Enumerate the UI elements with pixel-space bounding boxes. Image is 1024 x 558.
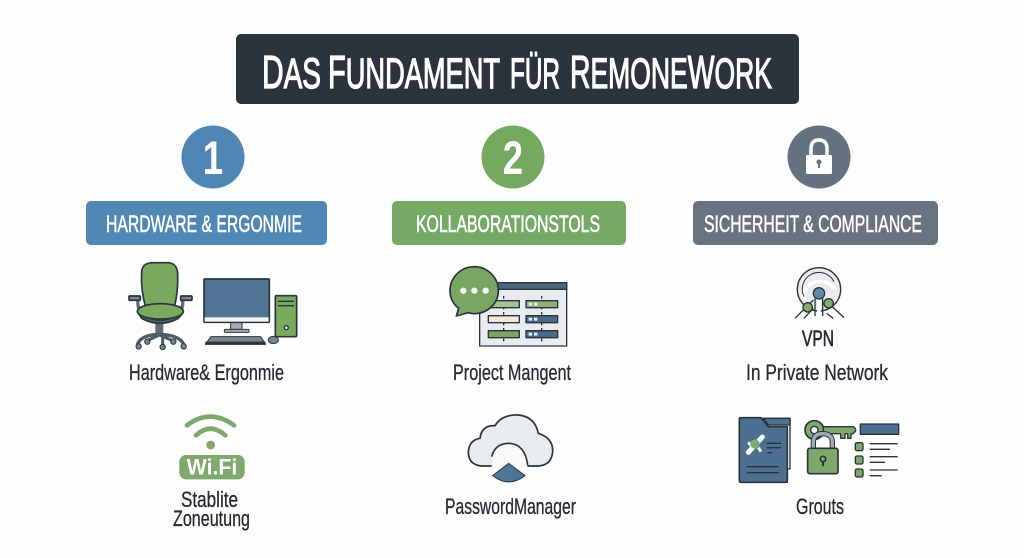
panel: collaboration tools	[392, 126, 626, 519]
label: stable connection: Zoneutung	[173, 506, 250, 531]
label: stable connection: Stablite	[181, 487, 238, 512]
heading banner: security	[693, 201, 938, 245]
icon: office chair and computer	[129, 263, 297, 350]
heading banner: hardware: HARDWARE & ERGONMIE	[106, 211, 302, 238]
label: project management: Project Mangent	[453, 360, 571, 385]
title: REMONEWORK	[570, 46, 772, 98]
heading banner: collaboration	[392, 201, 626, 245]
title: DAS	[262, 46, 321, 98]
title: FUNDAMENT	[328, 46, 500, 98]
heading banner: hardware	[86, 201, 327, 245]
heading banner: collaboration: KOLLABORATIONSTOLS	[416, 211, 600, 238]
panel: security and compliance	[693, 126, 938, 519]
icon: wifi	[179, 417, 245, 479]
label: grouts: Grouts	[796, 494, 844, 519]
title	[236, 34, 799, 104]
icon: wifi: Wi.Fi	[187, 454, 237, 479]
icon: folder, key, lock and checklist	[739, 418, 899, 482]
number badge 2: 2	[503, 132, 523, 184]
number badge 1: 1	[203, 132, 223, 184]
label: vpn	[746, 326, 889, 385]
label: vpn: VPN	[802, 326, 834, 351]
label: vpn: In Private Network	[746, 360, 889, 385]
icon: vpn network	[795, 268, 844, 318]
number badge 2	[482, 126, 544, 188]
title: FÜR	[510, 50, 560, 98]
label: hardware: Hardware& Ergonmie	[129, 360, 284, 385]
number badge 1	[182, 126, 244, 188]
icon: cloud	[468, 415, 553, 482]
lock badge	[788, 126, 850, 188]
label: password manager: PasswordManager	[445, 494, 576, 519]
icon: project board with chat bubble	[450, 267, 567, 346]
panel: hardware and ergonomics	[86, 126, 327, 531]
label: stable connection	[173, 487, 250, 531]
